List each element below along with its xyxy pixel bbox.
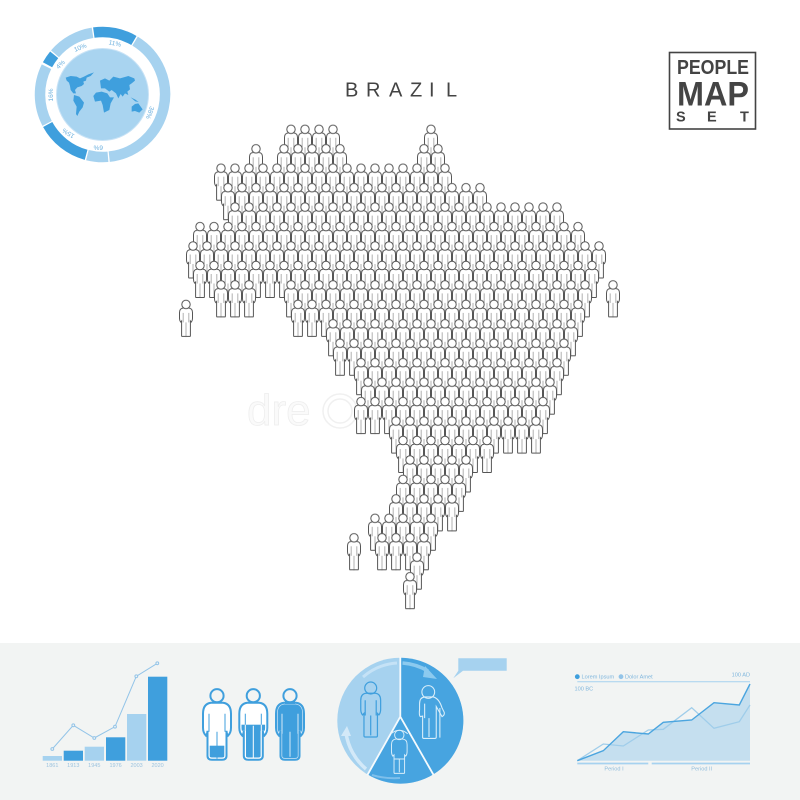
- icon: child: [391, 730, 408, 773]
- pie slice: left: [337, 658, 463, 784]
- year labels: 1976: [109, 763, 122, 769]
- legend: [574, 672, 750, 692]
- pie chart with person icons: [337, 657, 507, 784]
- top rule: [577, 681, 750, 683]
- pie slice: right: [400, 658, 463, 774]
- badge: people map set: PEOPLE: [677, 57, 749, 79]
- badge: people map set: MAP: [677, 76, 749, 114]
- icon: person medium fill: [238, 689, 268, 761]
- area: [577, 684, 750, 761]
- legend: Lorem Ipsum: [582, 675, 614, 681]
- donut percentage labels: 6%: [93, 144, 103, 150]
- donut percentage labels: 10%: [73, 42, 88, 54]
- icon: adult: [361, 682, 381, 737]
- legend: 100 BC: [574, 686, 593, 692]
- donut percentage labels: 11%: [108, 39, 122, 49]
- donut percentage labels: 16%: [48, 88, 55, 102]
- year labels: 1913: [67, 763, 79, 769]
- icon: person low fill: [203, 689, 231, 761]
- donut percentage labels: 15%: [61, 126, 76, 139]
- donut percentage labels: [48, 39, 155, 150]
- period labels: [604, 766, 713, 772]
- period labels: Period II: [691, 766, 713, 772]
- arrow: top right: [402, 663, 437, 679]
- legend: Dolor Amet: [625, 675, 653, 681]
- bars: [43, 677, 167, 761]
- badge: people map set: [670, 52, 756, 129]
- arrow: bottom left: [341, 726, 366, 769]
- trend line: [51, 662, 159, 750]
- watermark: [247, 386, 357, 435]
- people map of Brazil: [179, 124, 620, 610]
- year labels: [46, 763, 164, 769]
- donut percentage labels: 4%: [55, 59, 67, 71]
- year labels: 2003: [130, 763, 143, 769]
- year labels: 1945: [88, 763, 100, 769]
- bar chart with trend line: [43, 662, 167, 769]
- line chart: [574, 672, 750, 772]
- donut percentage labels: 38%: [144, 105, 155, 120]
- arrow: bottom arc: [372, 775, 400, 778]
- watermark: dre: [247, 386, 311, 435]
- series: light line: [577, 705, 750, 761]
- donut segments: [40, 32, 165, 157]
- period axis: [577, 762, 750, 764]
- bottom infographic band: [0, 643, 800, 800]
- year labels: 2020: [151, 763, 164, 769]
- icon: person full fill: [276, 689, 304, 760]
- pie slice: bottom: [368, 717, 433, 784]
- badge: people map set: SET: [676, 110, 749, 126]
- arrow: top left arc: [363, 663, 397, 677]
- legend: 100 AD: [732, 672, 750, 678]
- icon: elder with cane: [419, 686, 444, 738]
- donut chart with world map: [40, 32, 165, 157]
- period labels: Period I: [604, 766, 624, 772]
- year labels: 1861: [46, 763, 58, 769]
- series: dark line: [577, 684, 750, 761]
- title: BRAZIL: [345, 80, 457, 102]
- globe disc: [56, 48, 148, 140]
- three filled person icons: [203, 689, 304, 761]
- world map: [66, 72, 143, 116]
- callout: [453, 658, 507, 678]
